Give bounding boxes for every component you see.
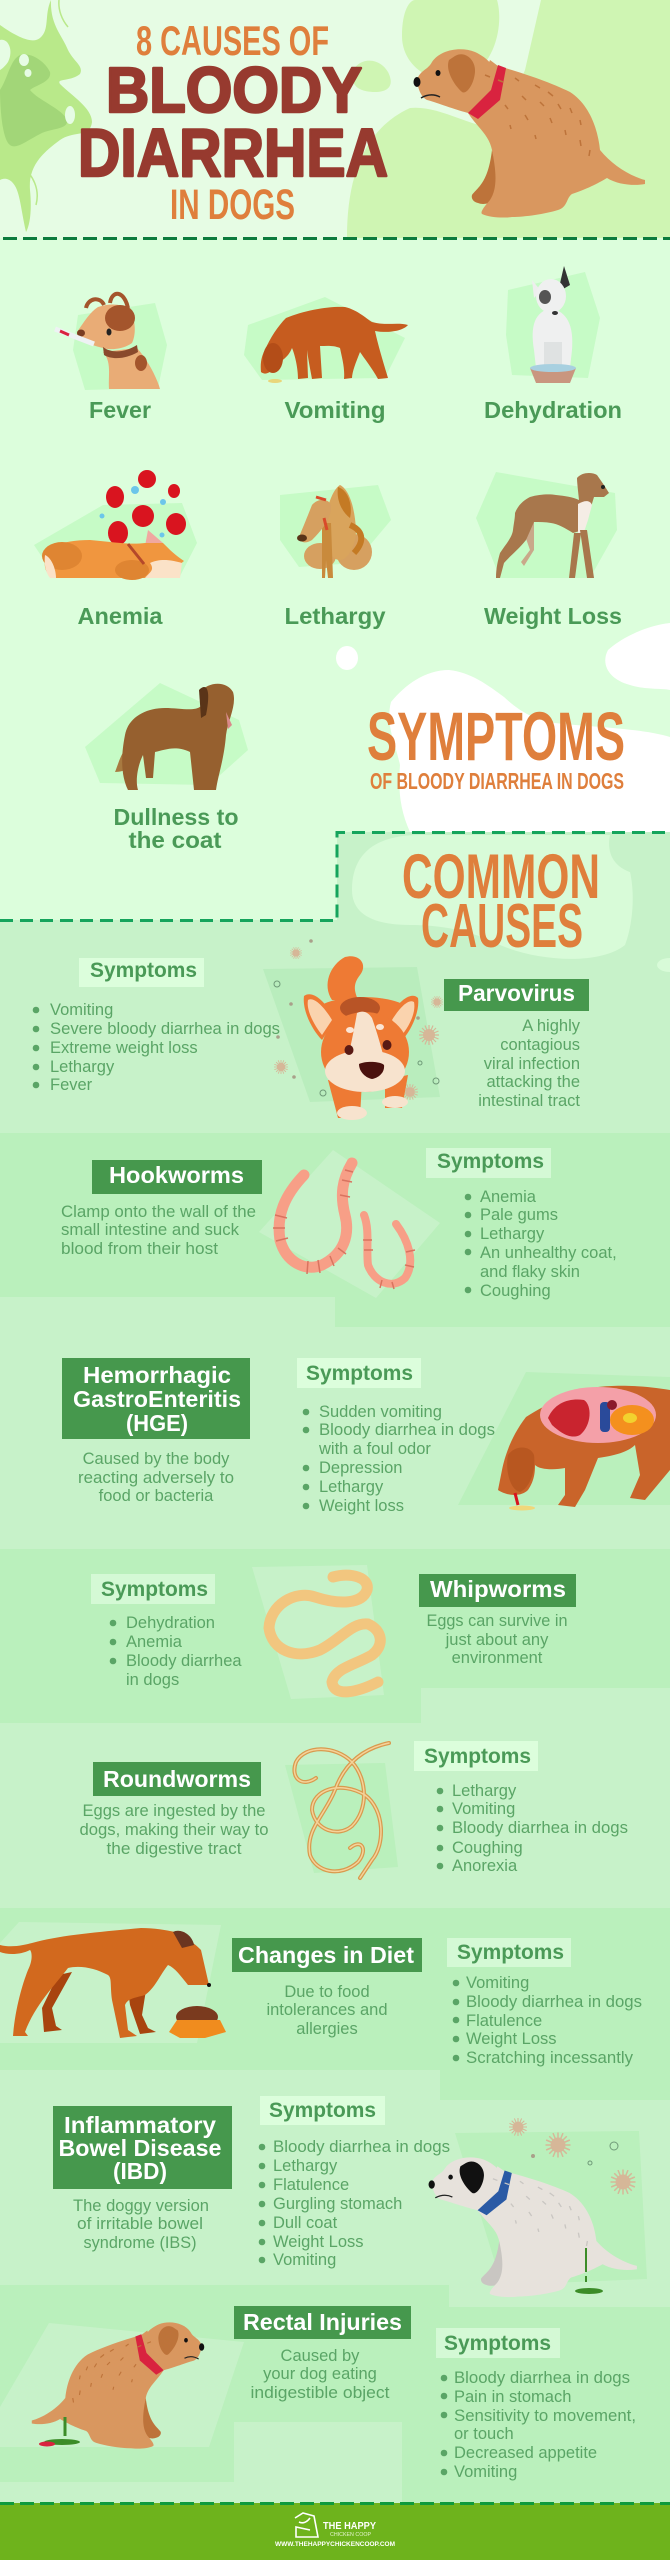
symptoms list: Coughing <box>452 1839 523 1857</box>
symptom: dehydration <box>484 266 622 423</box>
panel: whipworms <box>0 1549 670 1723</box>
cause label: rectal injuries: your dog eating <box>263 2365 377 2383</box>
panel: parvovirus <box>0 832 670 1133</box>
symptoms list: with a foul odor <box>318 1440 431 1458</box>
cause label: whipworms: just about any <box>445 1631 549 1649</box>
cause label: IBD: Bowel Disease <box>58 2135 222 2161</box>
cause label: rectal injuries: Caused by <box>281 2347 360 2365</box>
cause label: whipworms: environment <box>452 1649 543 1667</box>
symptoms list: Scratching incessantly <box>466 2049 634 2067</box>
paw background shape <box>347 0 670 238</box>
smoke decoration <box>0 0 92 232</box>
cause label: changes in diet <box>232 1938 422 2038</box>
title: DIARRHEA <box>78 115 388 191</box>
symptom: lethargy: Lethargy <box>284 603 386 629</box>
symptoms list: Dull coat <box>273 2214 338 2232</box>
symptoms list: Fever <box>50 1076 93 1094</box>
symptoms list: Depression <box>319 1459 402 1477</box>
symptoms list: Pain in stomach <box>454 2388 571 2406</box>
cause label: roundworms: dogs, making their way to <box>80 1821 268 1839</box>
cause label: parvovirus <box>444 979 589 1110</box>
symptoms list: Bloody diarrhea in dogs <box>454 2369 630 2387</box>
panel: hookworms <box>0 1133 670 1327</box>
cause label: parvovirus: viral infection <box>484 1055 580 1073</box>
decorative white blobs <box>336 623 670 832</box>
symptoms list: Decreased appetite <box>454 2444 597 2462</box>
symptom: anemia: Anemia <box>78 603 163 629</box>
symptoms list: An unhealthy coat, <box>480 1244 617 1262</box>
panel: header <box>0 0 670 238</box>
cause label: HGE <box>62 1358 250 1505</box>
symptom: fever: Fever <box>89 397 151 423</box>
symptoms list: Sensitivity to movement, <box>454 2407 636 2425</box>
symptoms list: Symptoms <box>457 1941 564 1964</box>
cause label: HGE: Caused by the body <box>83 1450 230 1468</box>
illustration: hookworms <box>259 1150 440 1298</box>
cause label: changes in diet: allergies <box>296 2020 358 2038</box>
symptoms list: Symptoms <box>306 1362 413 1385</box>
panel: hemorrhagic gastroenteritis <box>0 1297 670 1549</box>
symptoms list: Weight Loss <box>273 2233 364 2251</box>
symptoms list <box>297 1358 495 1515</box>
symptoms list: Lethargy <box>480 1225 545 1243</box>
symptoms list: Symptoms <box>444 2332 551 2355</box>
panel: rectal injuries <box>0 2285 670 2503</box>
symptoms list: Weight loss <box>319 1497 404 1515</box>
symptoms list: in dogs <box>126 1671 179 1689</box>
symptoms list: Bloody diarrhea in dogs <box>273 2138 450 2156</box>
symptoms list: Symptoms <box>437 1150 544 1173</box>
symptom: dullness to the coat: Dullness to <box>114 804 238 830</box>
symptoms list: Lethargy <box>319 1478 384 1496</box>
illustration: dog and food bowl <box>0 1922 226 2043</box>
cause label: changes in diet: Due to food <box>284 1983 370 2001</box>
symptom: anemia <box>34 470 197 629</box>
icon: sad brown dog <box>414 49 645 218</box>
cause label: HGE: food or bacteria <box>99 1487 214 1505</box>
symptoms list: Coughing <box>480 1282 551 1300</box>
cause label: IBD <box>53 2106 232 2252</box>
symptoms list <box>414 1741 628 1875</box>
footer brand text <box>275 2521 395 2548</box>
symptom: weight loss <box>476 472 622 629</box>
symptoms list: Bloody diarrhea in dogs <box>466 1993 642 2011</box>
cause label: whipworms: Eggs can survive in <box>426 1612 568 1630</box>
symptoms list: Pale gums <box>480 1206 558 1224</box>
illustration: corgi with viruses <box>263 939 443 1120</box>
footer brand text: CHICKEN COOP <box>330 2532 372 2538</box>
symptoms list: Anemia <box>126 1633 183 1651</box>
heading: common causes <box>402 842 600 961</box>
symptom: fever <box>55 294 167 423</box>
symptoms list: Extreme weight loss <box>50 1039 198 1057</box>
cause label: HGE: reacting adversely to <box>78 1469 234 1487</box>
cause label: changes in diet: Changes in Diet <box>238 1942 414 1968</box>
symptoms list: Bloody diarrhea in dogs <box>319 1421 495 1439</box>
illustration: dog with organs <box>458 1372 670 1510</box>
symptoms list: Anorexia <box>452 1857 518 1875</box>
cause label: roundworms: Eggs are ingested by the <box>82 1802 266 1820</box>
cause label: rectal injuries: Rectal Injuries <box>243 2309 402 2335</box>
symptoms list: Vomiting <box>452 1800 515 1818</box>
title: BLOODY <box>106 54 362 126</box>
cause label: IBD: The doggy version <box>73 2197 209 2215</box>
symptoms list: Symptoms <box>101 1578 208 1601</box>
cause label: roundworms <box>80 1762 268 1858</box>
panel: symptoms <box>0 238 670 920</box>
cause label: hookworms: Hookworms <box>109 1162 244 1188</box>
symptoms list: Flatulence <box>466 2012 542 2030</box>
title <box>78 17 388 229</box>
cause label: HGE: (HGE) <box>126 1410 188 1436</box>
symptoms list: Weight Loss <box>466 2030 556 2048</box>
cause label: parvovirus: A highly <box>522 1017 581 1035</box>
panel: inflammatory bowel disease <box>0 2070 670 2307</box>
symptoms list: Sudden vomiting <box>319 1403 442 1421</box>
symptoms list: Anemia <box>480 1188 537 1206</box>
cause label: parvovirus: contagious <box>500 1036 580 1054</box>
title: IN DOGS <box>170 181 295 229</box>
illustration: white dog with viruses <box>429 2118 647 2297</box>
symptom: dehydration: Dehydration <box>484 397 622 423</box>
symptom: dullness to the coat <box>85 683 248 853</box>
cause label: HGE: GastroEnteritis <box>73 1386 241 1412</box>
symptoms list: Gurgling stomach <box>273 2195 402 2213</box>
footer brand text: WWW.THEHAPPYCHICKENCOOP.COM <box>275 2541 395 2548</box>
symptoms list: Bloody diarrhea in dogs <box>452 1819 628 1837</box>
symptoms list: Symptoms <box>269 2099 376 2122</box>
symptoms list: and flaky skin <box>480 1263 580 1281</box>
cause label: rectal injuries: indigestible object <box>250 2384 390 2402</box>
symptoms list: Symptoms <box>90 959 197 982</box>
cause label: IBD: Inflammatory <box>64 2112 216 2138</box>
cause label: whipworms: Whipworms <box>430 1576 566 1602</box>
symptoms list <box>91 1574 242 1689</box>
footer <box>0 2503 670 2560</box>
cause label: whipworms <box>419 1574 576 1667</box>
symptoms list: Flatulence <box>273 2176 349 2194</box>
symptoms list: Vomiting <box>50 1001 113 1019</box>
symptoms list: Lethargy <box>452 1782 517 1800</box>
illustration: roundworm <box>285 1743 398 1878</box>
footer brand text: THE HAPPY <box>323 2521 376 2532</box>
symptom: lethargy <box>280 485 391 629</box>
cause label: parvovirus: Parvovirus <box>458 980 575 1006</box>
illustration: whipworm <box>252 1565 384 1699</box>
symptoms list <box>447 1938 642 2067</box>
symptom: dullness to the coat: the coat <box>128 827 222 853</box>
illustration: sitting dog <box>0 2322 244 2449</box>
cause label: roundworms: the digestive tract <box>106 1840 242 1858</box>
symptoms list <box>436 2328 636 2481</box>
symptoms list: Vomiting <box>273 2251 336 2269</box>
symptoms list: or touch <box>454 2425 514 2443</box>
symptoms list: Vomiting <box>466 1974 529 1992</box>
symptoms list <box>426 1148 617 1300</box>
panel: roundworms <box>0 1688 670 1908</box>
symptom: vomiting: Vomiting <box>284 397 386 423</box>
symptoms list: Symptoms <box>424 1745 531 1768</box>
symptom: weight loss: Weight Loss <box>484 603 622 629</box>
panel: changes in diet <box>0 1908 670 2100</box>
symptoms list <box>33 958 280 1094</box>
symptoms list: Vomiting <box>454 2463 517 2481</box>
symptoms list <box>259 2096 450 2269</box>
title: 8 CAUSES OF <box>136 17 329 64</box>
symptoms list: Bloody diarrhea <box>126 1652 242 1670</box>
symptoms list: Lethargy <box>273 2157 338 2175</box>
cause label: hookworms: blood from their host <box>61 1240 218 1258</box>
cause label: parvovirus: intestinal tract <box>478 1092 580 1110</box>
symptom: vomiting <box>244 297 408 423</box>
cause label: changes in diet: intolerances and <box>266 2001 388 2019</box>
symptoms list: Dehydration <box>126 1614 215 1632</box>
cause label: hookworms <box>61 1160 262 1258</box>
cause label: HGE: Hemorrhagic <box>83 1362 231 1388</box>
cause label: IBD: syndrome (IBS) <box>84 2234 196 2252</box>
symptoms list: Lethargy <box>50 1058 115 1076</box>
cause label: IBD: (IBD) <box>113 2158 167 2184</box>
icon: chicken coop logo <box>295 2513 318 2537</box>
cause label: roundworms: Roundworms <box>103 1766 251 1792</box>
cause label: hookworms: small intestine and suck <box>61 1221 240 1239</box>
cause label: rectal injuries <box>234 2306 411 2402</box>
cause label: IBD: of irritable bowel <box>77 2215 203 2233</box>
cause label: parvovirus: attacking the <box>486 1073 580 1091</box>
symptoms list: Severe bloody diarrhea in dogs <box>50 1020 280 1038</box>
cause label: hookworms: Clamp onto the wall of the <box>61 1203 256 1221</box>
